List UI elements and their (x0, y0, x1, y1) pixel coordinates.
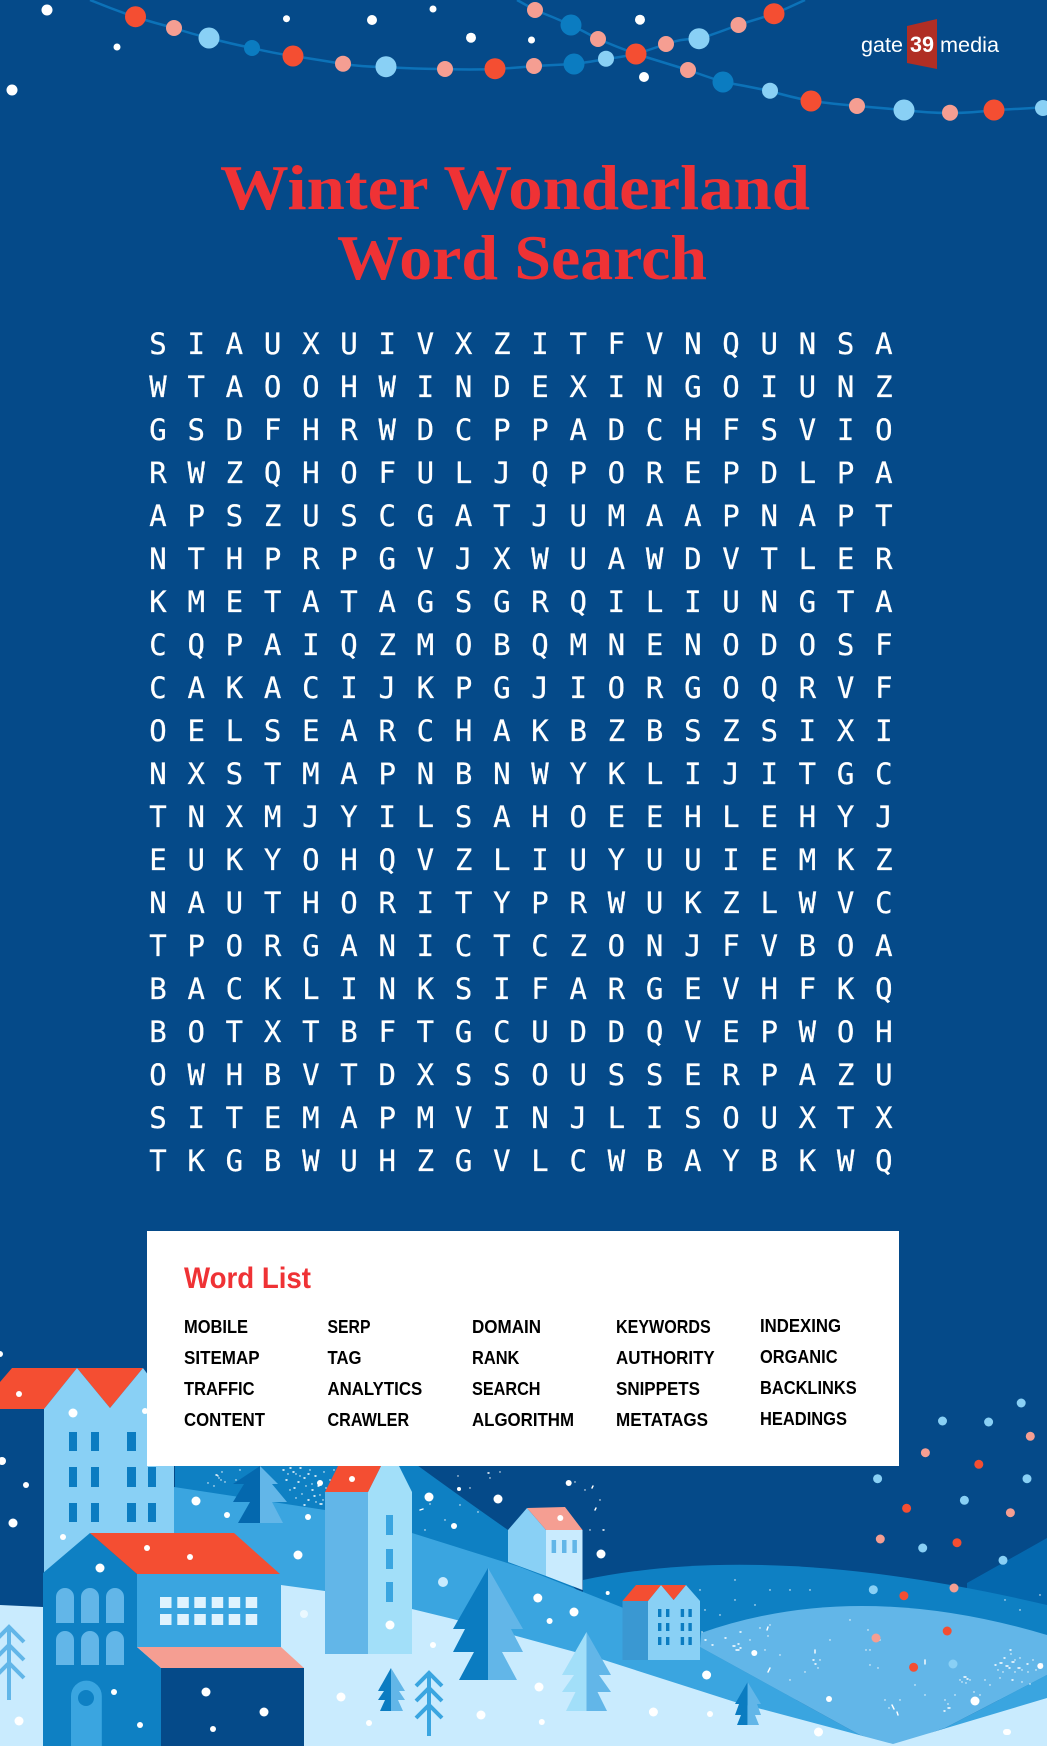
tower (325, 1466, 412, 1654)
word columns: ALGORITHM (472, 1410, 574, 1430)
word columns: TRAFFIC (184, 1379, 254, 1399)
title: Winter Wonderland (220, 152, 810, 223)
word search letter grid: SIAUXUIVXZITFVNQUNSA (149, 327, 893, 361)
string lights garland (90, 0, 1047, 121)
word columns: AUTHORITY (616, 1348, 715, 1368)
word search letter grid: GSDFHRWDCPPADCHFSVIO (149, 413, 893, 447)
title (220, 152, 810, 293)
word search letter grid: BACKLINKSIFARGEVHFKQ (149, 972, 893, 1006)
word search letter grid: NXSTMAPNBNWYKLIJITGC (149, 757, 893, 791)
logo: gate 39 media: gate (861, 34, 903, 57)
word columns: KEYWORDS (616, 1317, 711, 1337)
word search letter grid: TPORGANICTCZONJFVBOA (149, 929, 893, 963)
word columns: SITEMAP (184, 1348, 260, 1368)
winter village scene (0, 1351, 1047, 1746)
word search letter grid: SITEMAPMVINJLISOUXTX (149, 1101, 893, 1135)
logo: gate 39 media: media (940, 34, 999, 57)
word search letter grid: RWZQHOFULJQPOREPDLPA (149, 456, 893, 490)
sky snow dots (6, 4, 649, 96)
right foreground slope (893, 1675, 1047, 1746)
foreground snow (0, 1585, 1047, 1746)
word search letter grid: CAKACIJKPGJIORGOQRVF (149, 671, 893, 705)
branch tree left (0, 1626, 24, 1700)
large tree (453, 1568, 523, 1680)
word columns (184, 1316, 857, 1430)
word columns: TAG (328, 1348, 362, 1368)
heading: word list: Word List (184, 1262, 311, 1295)
word search letter grid (149, 327, 893, 1178)
split tree behind tower (233, 1466, 287, 1523)
word columns: DOMAIN (472, 1317, 541, 1337)
word columns: ORGANIC (760, 1347, 838, 1367)
small tree right (735, 1682, 761, 1725)
pale tree (562, 1632, 611, 1711)
right hill (700, 1606, 1047, 1746)
word columns: SERP (328, 1317, 370, 1337)
small tree centre (378, 1668, 405, 1711)
word search letter grid: OELSEARCHAKBZBSZSIXI (149, 714, 893, 748)
word columns: CONTENT (184, 1410, 265, 1430)
light house with red roof (0, 1368, 174, 1573)
word columns: HEADINGS (760, 1409, 847, 1429)
logo: gate 39 media: 39 (910, 32, 934, 57)
word columns: RANK (472, 1348, 519, 1368)
word columns: SEARCH (472, 1379, 540, 1399)
word columns: INDEXING (760, 1316, 841, 1336)
word columns: ANALYTICS (328, 1379, 422, 1399)
word search letter grid: APSZUSCGATJUMAAPNAPT (149, 499, 893, 533)
word search letter grid: EUKYOHQVZLIUYUUIEMKZ (149, 843, 893, 877)
falling snow (0, 1351, 1043, 1736)
word search letter grid: TNXMJYILSAHOEEHLEHYJ (149, 800, 893, 834)
word columns: BACKLINKS (760, 1378, 857, 1398)
word search letter grid: TKGBWUHZGVLCWBAYBKWQ (149, 1144, 893, 1178)
back hill right (583, 1565, 1047, 1700)
word search letter grid: WTAOOHWINDEXINGOIUNZ (149, 370, 893, 404)
back hill left (175, 1460, 600, 1610)
panel: word list (147, 1231, 899, 1466)
title: Word Search (337, 222, 707, 293)
branch tree centre (416, 1672, 442, 1736)
word search letter grid: KMETATAGSGRQILIUNGTA (149, 585, 893, 619)
small red-roof house (622, 1585, 700, 1660)
word search letter grid: NTHPRPGVJXWUAWDVTLER (149, 542, 893, 576)
blue building (43, 1533, 304, 1746)
speckle texture (208, 1468, 1042, 1715)
word search letter grid: OWHBVTDXSSOUSSERPAZU (149, 1058, 893, 1092)
word search letter grid: CQPAIQZMOBQMNENODOSF (149, 628, 893, 662)
word columns: CRAWLER (328, 1410, 409, 1430)
middle hill (44, 1487, 893, 1746)
word search letter grid: BOTXTBFTGCUDDQVEPWOH (149, 1015, 893, 1049)
hilltop house with salmon roof (508, 1507, 582, 1590)
word columns: MOBILE (184, 1317, 248, 1337)
word columns: SNIPPETS (616, 1379, 700, 1399)
far right hill (967, 1538, 1047, 1640)
logo: gate 39 media (861, 19, 999, 69)
coloured ornament dots (869, 1398, 1035, 1672)
word search letter grid: NAUTHORITYPRWUKZLWVC (149, 886, 893, 920)
word columns: METATAGS (616, 1410, 708, 1430)
